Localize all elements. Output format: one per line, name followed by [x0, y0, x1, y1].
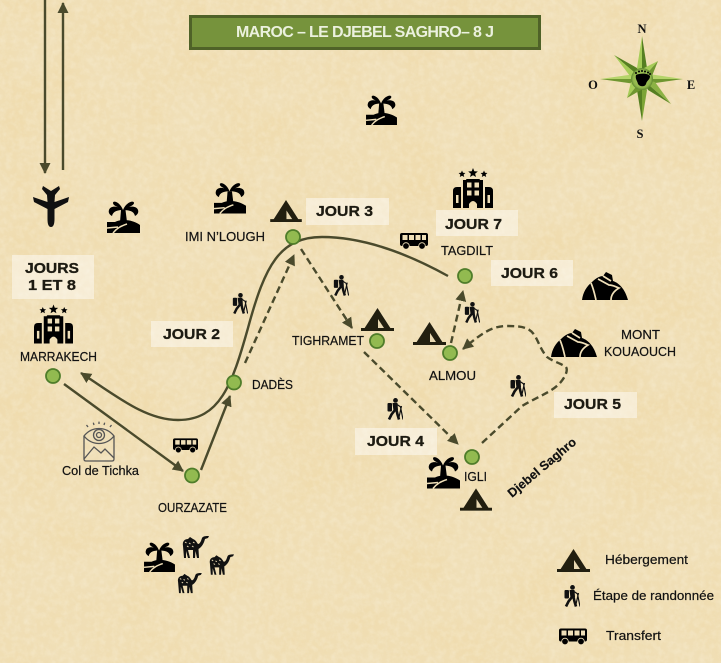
legend icon: tent — [557, 549, 590, 572]
label: jour 3: JOUR 3 — [316, 203, 373, 220]
label: jour 2: JOUR 2 — [163, 326, 220, 343]
icon: palm top centre — [366, 96, 397, 125]
legend icon: bus — [559, 628, 587, 645]
legend text: hiking stage: Étape de randonnée — [593, 588, 714, 603]
compass north: N — [637, 22, 647, 36]
label: jour 4: JOUR 4 — [367, 433, 425, 450]
stop: Ourzazate — [185, 468, 199, 482]
icon: camels — [178, 536, 234, 593]
title banner — [190, 16, 540, 48]
place: Djebel Saghro: Djebel Saghro — [505, 435, 579, 500]
stop: Dadès — [227, 376, 241, 390]
icon: Col de Tichka panorama — [84, 422, 114, 461]
route: Igli to Almou hike — [463, 326, 567, 443]
place: Dadès: DADÈS — [252, 377, 293, 392]
place: Ourzazate: OURZAZATE — [158, 501, 227, 515]
route: return road Tagdilt to Marrakech — [81, 237, 448, 420]
compass rose — [600, 36, 683, 121]
label: jour 7: JOUR 7 — [445, 216, 502, 233]
icon: palm Igli — [427, 457, 460, 488]
flight arrow outbound — [62, 3, 64, 170]
stop: Tighramet — [370, 334, 384, 348]
stop: Imi n'Lough — [286, 230, 300, 244]
place: Mont Kouaouch: MONT — [621, 328, 660, 342]
title banner: MAROC – LE DJEBEL SAGHRO– 8 J — [236, 24, 494, 41]
stop: Igli — [465, 450, 479, 464]
label: jours 1 et 8: 1 ET 8 — [28, 277, 76, 294]
icon: hiker day 4 — [388, 398, 403, 420]
stop: Tagdilt — [458, 269, 472, 283]
legend icon: hiker — [564, 585, 580, 606]
icon: mountain east — [582, 272, 628, 300]
icon: bus Ourzazate — [173, 438, 198, 453]
route: Dadès to Imi n'Lough hike — [245, 255, 294, 363]
icon: hotel Marrakech — [34, 304, 73, 344]
place: Igli: IGLI — [464, 470, 487, 484]
compass east: E — [687, 78, 695, 92]
place: Col de Tichka: Col de Tichka — [62, 464, 139, 478]
route: Ourzazate to Dadès — [201, 396, 230, 470]
stop: Almou — [443, 346, 457, 360]
label: jour 6 — [491, 260, 573, 286]
compass south: S — [637, 127, 644, 141]
label: jour 3 — [306, 198, 389, 225]
icon: hiker day 3 — [334, 275, 349, 296]
flight arrow inbound — [44, 0, 46, 173]
place: Mont Kouaouch — [604, 328, 676, 359]
legend — [557, 549, 714, 645]
legend text: transfer: Transfert — [606, 629, 662, 643]
label: jour 4 — [355, 428, 437, 455]
label: jours 1 et 8: JOURS — [25, 260, 79, 277]
route: Almou to Tagdilt hike — [451, 291, 463, 343]
icon: paw — [635, 70, 651, 86]
icon: mountain Kouaouch — [551, 329, 597, 357]
icon: bus day 7 — [400, 233, 428, 249]
icon: hiker day 5 — [510, 375, 526, 396]
label: jour 6: JOUR 6 — [501, 265, 558, 282]
icon: hiker day 2 — [233, 293, 248, 314]
place: Mont Kouaouch: KOUAOUCH — [604, 345, 676, 359]
icon: tent Imi n'Lough — [270, 200, 302, 222]
route: Tighramet to Igli hike — [364, 352, 458, 444]
legend text: accommodation: Hébergement — [605, 553, 689, 567]
place: Almou: ALMOU — [429, 369, 476, 383]
icon: tent Almou — [413, 322, 446, 345]
icon: palm Imi n'Lough — [214, 183, 246, 214]
label: jour 7 — [436, 210, 518, 236]
place: Tagdilt: TAGDILT — [441, 244, 493, 258]
place: Imi n'Lough: IMI N’LOUGH — [185, 230, 265, 244]
icon: hiker day 6 — [465, 302, 480, 323]
route: Marrakech to Ourzazate — [64, 384, 183, 471]
compass west: O — [588, 78, 598, 92]
label: jour 2 — [151, 321, 233, 347]
icon: tent Igli — [460, 488, 492, 511]
place: Tighramet: TIGHRAMET — [292, 334, 364, 348]
icon: hotel Tagdilt — [453, 168, 493, 208]
label: jour 5 — [554, 392, 637, 418]
icon: palm near plane — [107, 202, 140, 233]
icon: palm Ourzazate — [144, 543, 175, 572]
stop: Marrakech — [46, 369, 60, 383]
icon: plane — [33, 186, 69, 227]
place: Marrakech: MARRAKECH — [20, 350, 97, 364]
label: jour 5: JOUR 5 — [564, 396, 621, 413]
route: Imi n'Lough to Tighramet hike — [301, 249, 352, 328]
label: jours 1 et 8 — [12, 255, 94, 299]
icon: tent Tighramet — [361, 308, 394, 331]
